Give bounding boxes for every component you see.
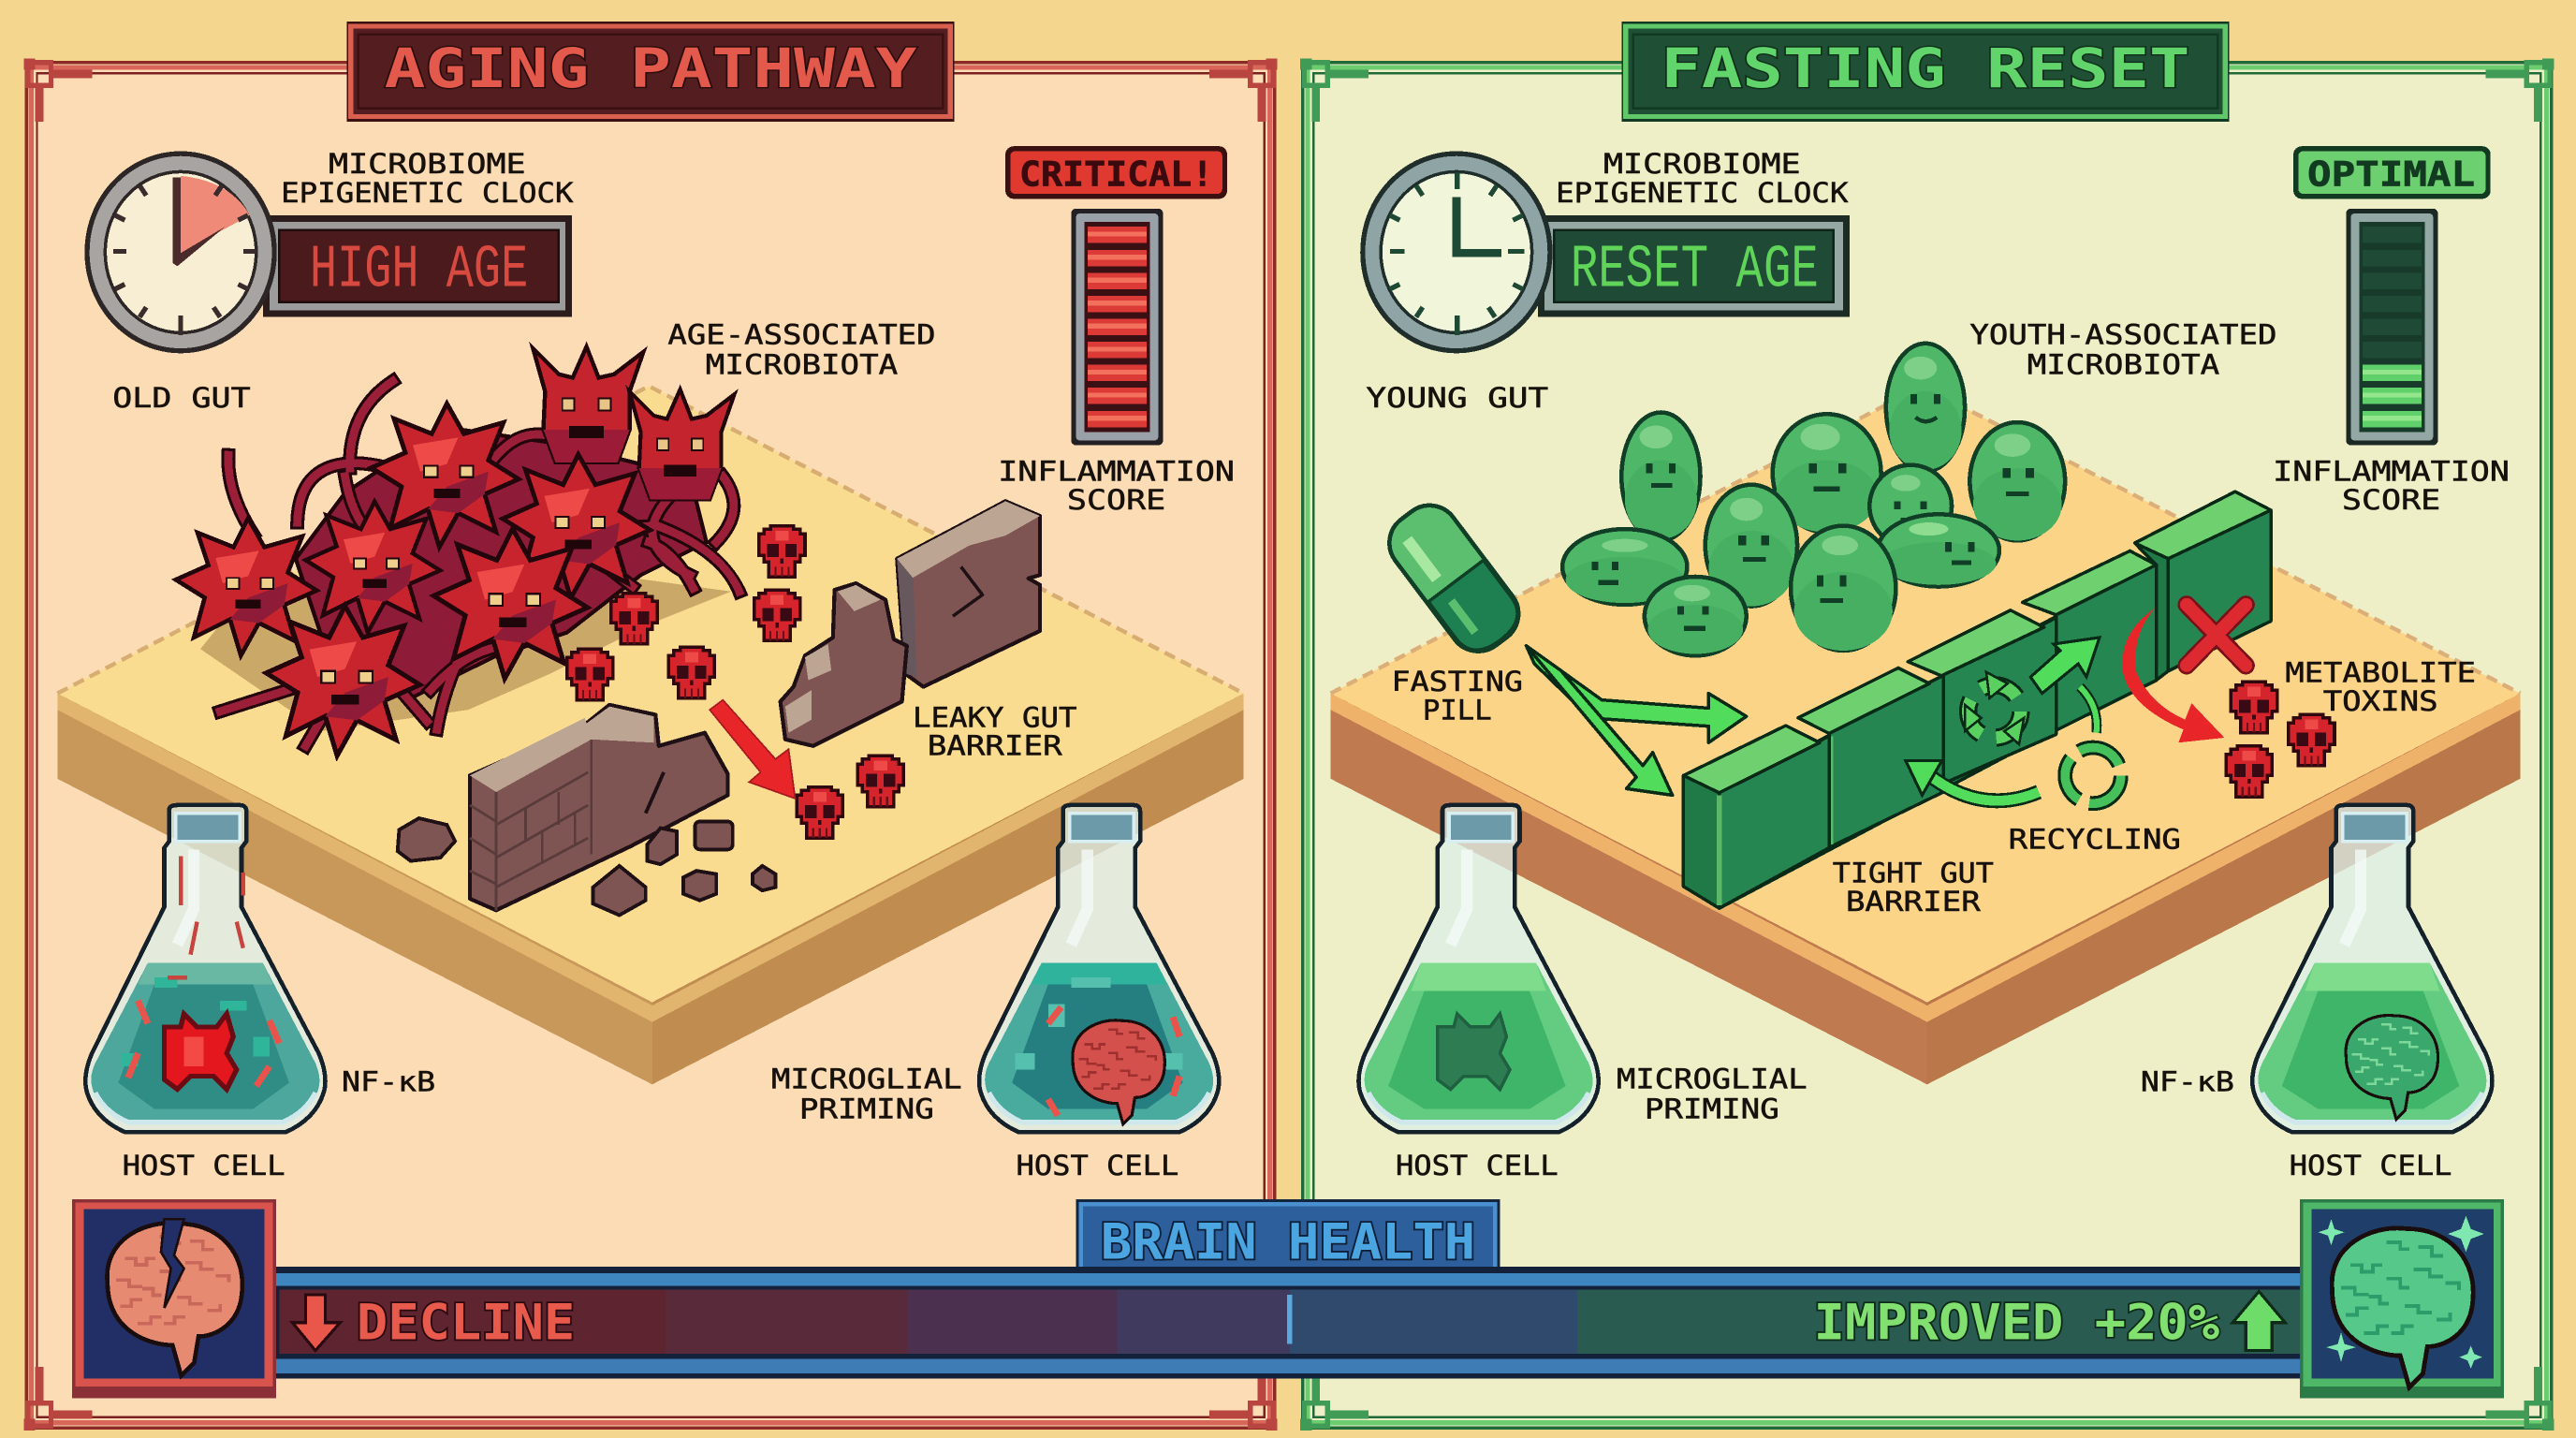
arrow: recycling loop to barrier xyxy=(1906,687,2097,800)
label: tight gut barrier xyxy=(1833,857,1994,917)
bottom meter: brain health xyxy=(72,1199,2504,1399)
bacterium xyxy=(1878,514,1999,587)
label: host cell reset left: HOST CELL xyxy=(1396,1150,1559,1181)
block 4 xyxy=(2023,550,2157,730)
wall segment front with bricks xyxy=(470,705,728,910)
label: tight gut barrier: BARRIER xyxy=(1846,886,1981,917)
label: tight gut barrier: TIGHT GUT xyxy=(1833,857,1994,888)
bacterium xyxy=(1886,344,1965,472)
label: microbiome epigenetic clock reset: MICROBIOME xyxy=(1603,148,1801,180)
bacterium xyxy=(1791,526,1895,651)
label: inflammation score: SCORE xyxy=(1067,484,1165,516)
block 3 xyxy=(1908,610,2056,784)
readout: decline: DECLINE xyxy=(357,1294,575,1351)
panel: aging pathway xyxy=(24,22,1277,1430)
label: age-associated microbiota: MICROBIOTA xyxy=(706,348,898,380)
panel frame: fasting xyxy=(1301,59,2553,1430)
flask: microglial priming host cell aged xyxy=(979,805,1219,1132)
readout: improved +20%: IMPROVED +20% xyxy=(1814,1294,2219,1351)
clock: high age xyxy=(84,151,277,353)
bacterium xyxy=(1869,465,1952,547)
block 5 xyxy=(2135,492,2271,681)
flask: healthy brain host cell xyxy=(2252,805,2492,1132)
label: microglial priming aged: MICROGLIAL xyxy=(771,1064,962,1095)
label: leaky gut barrier xyxy=(913,702,1076,761)
wall stump middle xyxy=(781,583,907,746)
gauge: inflammation score low xyxy=(2346,209,2438,446)
icon: recycling loop xyxy=(2065,748,2121,803)
digital readout: high age xyxy=(263,215,572,317)
label: microglial priming aged: PRIMING xyxy=(799,1093,934,1124)
label: youth-associated microbiota: YOUTH-ASSOCIATED xyxy=(1969,319,2277,351)
label: nf-kb reset: NF-κB xyxy=(2141,1065,2234,1097)
label: nf-kb aged: NF-κB xyxy=(342,1065,435,1097)
label: leaky gut barrier: BARRIER xyxy=(928,729,1062,761)
tab: brain health heading: BRAIN HEALTH xyxy=(1101,1213,1475,1270)
badge: critical xyxy=(1005,146,1227,198)
platform: old gut xyxy=(57,386,1244,1084)
flask: nf-kb calm host cell xyxy=(1358,805,1599,1132)
digital readout: reset age xyxy=(1538,215,1850,317)
block 1 xyxy=(1683,726,1829,908)
icon box: broken brain xyxy=(72,1199,276,1399)
label: youth-associated microbiota: MICROBIOTA xyxy=(2027,348,2219,380)
title banner: fasting reset: FASTING RESET xyxy=(1661,37,2190,100)
title banner: fasting reset xyxy=(1621,22,2230,122)
label: host cell reset right: HOST CELL xyxy=(2290,1150,2452,1181)
label: microbiome epigenetic clock reset: EPIGENETIC CLOCK xyxy=(1556,177,1849,209)
rubble xyxy=(398,818,775,916)
label: host cell left: HOST CELL xyxy=(123,1150,285,1181)
label: host cell right of aging panel: HOST CELL xyxy=(1017,1150,1178,1181)
label: inflammation score reset xyxy=(2273,455,2510,516)
digital readout: high age: HIGH AGE xyxy=(310,236,528,304)
barrier backing xyxy=(1720,510,2271,908)
label: age-associated microbiota: AGE-ASSOCIATED xyxy=(667,319,936,351)
toxin skulls: leaking xyxy=(567,526,903,838)
label: inflammation score xyxy=(998,455,1235,516)
label: fasting pill: PILL xyxy=(1423,695,1492,726)
arrow: barrier repair up xyxy=(2030,638,2100,694)
label: inflammation score reset: SCORE xyxy=(2342,484,2440,516)
bacterium xyxy=(1645,577,1747,655)
bacterium xyxy=(1705,485,1797,607)
label: microglial priming aged xyxy=(771,1064,962,1124)
bacterium xyxy=(1621,413,1701,540)
label: age-associated microbiota xyxy=(667,319,936,380)
icon: fasting pill xyxy=(1378,493,1530,663)
label: microbiome epigenetic clock: MICROBIOME xyxy=(329,148,526,180)
block 2 xyxy=(1798,668,1943,847)
tab: brain health heading xyxy=(1076,1199,1500,1275)
tentacles xyxy=(220,381,739,746)
label: microbiome epigenetic clock xyxy=(281,148,574,209)
label: microglial priming reset: MICROGLIAL xyxy=(1617,1064,1808,1095)
label: young gut: YOUNG GUT xyxy=(1366,382,1548,414)
microbiota: youth-associated friendly bacteria xyxy=(1562,344,2065,655)
arrow: toxin leak xyxy=(710,700,795,799)
bacterium xyxy=(1562,529,1687,605)
label: fasting pill: FASTING xyxy=(1392,666,1523,697)
ground shadow under microbiota xyxy=(200,559,731,731)
digital readout: reset age: RESET AGE xyxy=(1571,236,1819,304)
label: youth-associated microbiota xyxy=(1969,319,2277,380)
label: microglial priming reset: PRIMING xyxy=(1645,1093,1779,1124)
toxin skulls: blocked xyxy=(2226,682,2334,797)
panel frame: aging xyxy=(24,59,1277,1430)
flask: nf-kb host cell aged xyxy=(85,805,326,1132)
badge: optimal: OPTIMAL xyxy=(2307,154,2475,194)
icon box: healthy brain xyxy=(2300,1199,2504,1399)
clock: reset xyxy=(1360,151,1553,353)
clump body xyxy=(296,427,707,698)
label: metabolite toxins xyxy=(2285,656,2476,717)
label: inflammation score reset: INFLAMMATION xyxy=(2273,455,2510,487)
title banner: aging pathway: AGING PATHWAY xyxy=(385,37,917,100)
label: recycling: RECYCLING xyxy=(2009,823,2181,855)
leaky gut barrier: broken wall xyxy=(470,501,1040,910)
label: microbiome epigenetic clock: EPIGENETIC CLOCK xyxy=(281,177,574,209)
wall stump right xyxy=(897,501,1040,687)
label: microbiome epigenetic clock reset xyxy=(1556,148,1849,209)
badge: optimal xyxy=(2293,146,2491,198)
gauge: inflammation score high xyxy=(1071,209,1164,446)
microbiota: age-associated spiky bacteria xyxy=(176,346,739,756)
label: metabolite toxins: METABOLITE xyxy=(2285,656,2476,688)
gut barrier: tight green blocks xyxy=(1683,492,2271,908)
icon: blocked x xyxy=(2187,605,2246,666)
label: leaky gut barrier: LEAKY GUT xyxy=(913,702,1076,734)
platform: young gut xyxy=(1331,386,2520,1084)
panel: fasting reset xyxy=(1301,22,2553,1430)
badge: critical: CRITICAL! xyxy=(1019,154,1213,194)
title banner: aging pathway xyxy=(346,22,955,122)
label: metabolite toxins: TOXINS xyxy=(2323,685,2438,717)
arrows: pill effect to barrier xyxy=(1526,646,1747,795)
icon: recycling symbol on barrier xyxy=(1965,672,2024,744)
bacterium xyxy=(1969,422,2065,540)
arrow: toxins deflected xyxy=(2122,608,2224,742)
label: old gut: OLD GUT xyxy=(112,382,251,414)
bacterium xyxy=(1773,414,1881,533)
label: inflammation score: INFLAMMATION xyxy=(998,455,1235,487)
label: fasting pill xyxy=(1392,666,1523,726)
label: microglial priming reset xyxy=(1617,1064,1808,1124)
meter track xyxy=(271,1267,2308,1378)
